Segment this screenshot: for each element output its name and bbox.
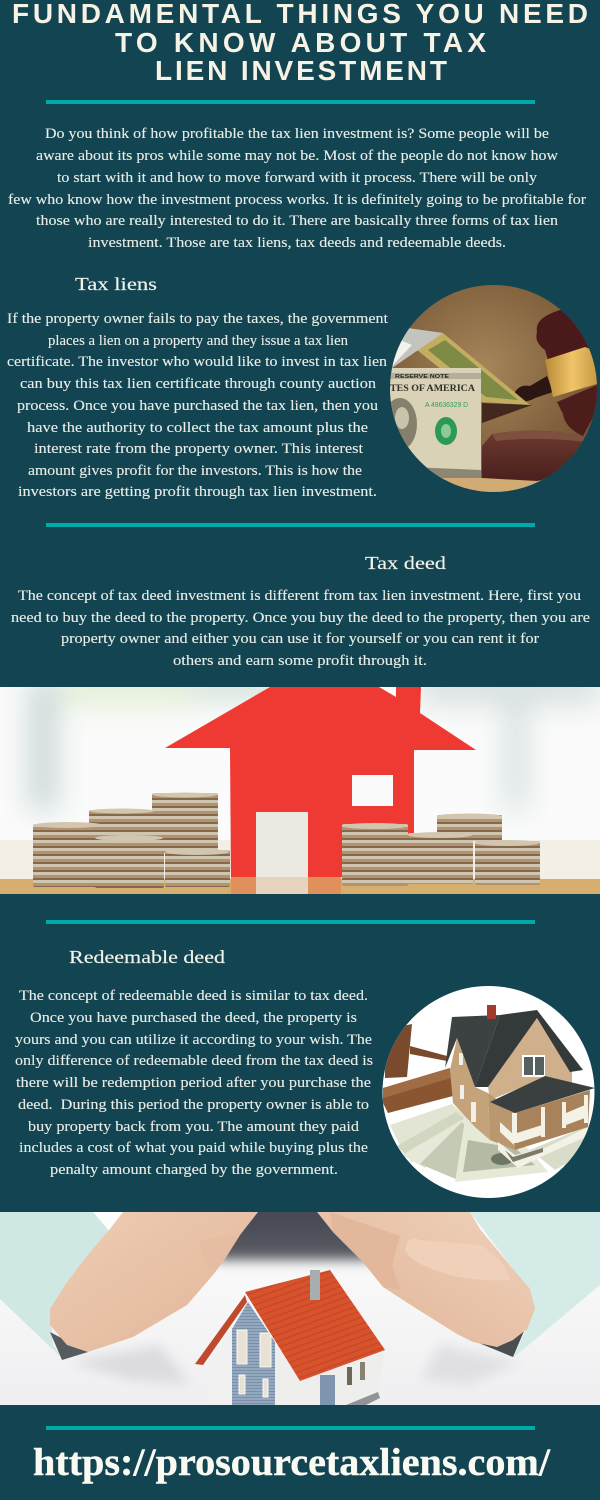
chimney — [487, 1005, 496, 1019]
text block: tax liens: certificate. The investor who would like to invest in tax lien — [7, 354, 387, 370]
house walls — [450, 1038, 490, 1140]
right hand — [317, 1212, 535, 1347]
text block: redeemable deed: only difference of redeemable deed from the tax deed is — [15, 1053, 373, 1069]
dollar roof — [417, 333, 530, 405]
left hand — [50, 1212, 258, 1352]
roofs — [445, 1015, 500, 1087]
windows — [237, 1330, 271, 1397]
image: dollar house and gavel circle: TES OF AMERICA — [390, 384, 475, 394]
text block: redeemable deed: includes a cost of what you paid while buying plus the — [19, 1140, 368, 1156]
image: dollar house and gavel circle: RESERVE NOTE — [395, 374, 450, 380]
text block: tax deed: need to buy the deed to the property. Once you buy the deed to the property, then you are — [11, 610, 590, 626]
chimney — [310, 1270, 320, 1300]
intro text block: investment. Those are tax liens, tax deeds and redeemable deeds. — [88, 235, 506, 251]
text block: tax liens: interest rate from the property owner. This interest — [34, 441, 363, 457]
text block: tax liens: process. Once you have purchased the tax lien, then you — [17, 398, 378, 414]
intro text block: aware about its pros while some may not be. Most of the people do not know how — [36, 148, 559, 164]
image: model house on money circle — [380, 984, 600, 1200]
coin stacks — [33, 793, 540, 888]
divider: after tax deed image — [46, 920, 535, 924]
text block: redeemable deed: yours and you can utilize it according to your wish. The — [15, 1032, 372, 1048]
text block: redeemable deed: buy property back from you. The amount they paid — [28, 1119, 360, 1135]
house walls — [208, 1329, 232, 1405]
window — [522, 1055, 545, 1077]
text block: tax deed: The concept of tax deed investment is different from tax lien investment. Here, first you — [18, 588, 581, 604]
dark backdrop — [218, 1212, 368, 1270]
red house — [165, 687, 476, 877]
text block: tax deed: others and earn some profit through it. — [173, 653, 427, 669]
footer url: https://prosourcetaxliens.com/ — [33, 1441, 551, 1484]
title: TO KNOW ABOUT TAX — [115, 27, 486, 58]
cuffs — [50, 1332, 88, 1360]
text block: redeemable deed: there will be redemption period after you purchase the — [16, 1075, 371, 1091]
intro text block — [8, 126, 586, 251]
text block: tax liens: have the authority to collect the tax amount plus the — [27, 420, 368, 436]
heading: Tax deed: Tax deed — [365, 553, 446, 573]
gavel head — [536, 310, 589, 359]
gavel handle — [515, 376, 553, 402]
sound block — [482, 430, 586, 481]
thumb — [405, 1238, 510, 1280]
divider: footer — [46, 1426, 535, 1430]
intro text block: Do you think of how profitable the tax lien investment is? Some people will be — [45, 126, 549, 142]
text block: tax liens: investors are getting profit through tax lien investment. — [18, 484, 377, 500]
divider: after tax liens — [46, 523, 535, 527]
table — [0, 879, 600, 894]
text block: redeemable deed: Once you have purchased the deed, the property is — [30, 1010, 357, 1026]
text block: redeemable deed — [15, 988, 373, 1178]
heading: Tax liens: Tax liens — [75, 274, 157, 294]
text block: tax liens: If the property owner fails to pay the taxes, the government — [7, 311, 388, 327]
gavel — [383, 1068, 453, 1113]
intro text block: to start with it and how to move forward with it process. There will be only — [57, 170, 538, 186]
money fan — [390, 1104, 470, 1146]
porch — [498, 1095, 590, 1168]
text block: tax liens: amount gives profit for the investors. This is how the — [28, 463, 362, 479]
divider: under title — [46, 100, 535, 104]
dollar bill front — [388, 368, 481, 480]
text block: tax deed: property owner and either you can use it for yourself or you can rent it for — [61, 631, 539, 647]
image: red paper house and coins — [0, 670, 600, 894]
text block: tax liens: places a lien on a property and they issue a tax lien — [48, 333, 348, 349]
text block: redeemable deed: penalty amount charged by the government. — [50, 1162, 338, 1178]
title: LIEN INVESTMENT — [155, 55, 447, 86]
text block: tax liens — [7, 311, 388, 500]
text block: redeemable deed: deed. During this period the property owner is able to — [18, 1097, 369, 1113]
title — [12, 0, 588, 86]
intro text block: few who know how the investment process works. It is definitely going to be profitable for — [8, 192, 586, 208]
text block: tax deed — [11, 588, 590, 669]
roof — [245, 1270, 385, 1381]
text block: redeemable deed: The concept of redeemable deed is similar to tax deed. — [19, 988, 368, 1004]
image: dollar house and gavel circle: A 49636329 D — [425, 400, 469, 409]
sleeves — [0, 1212, 110, 1358]
image: hands sheltering a house — [0, 1200, 600, 1405]
image: dollar house and gavel circle — [383, 283, 600, 495]
heading: Redeemable deed: Redeemable deed — [69, 947, 225, 967]
text block: tax liens: can buy this tax lien certificate through county auction — [20, 376, 376, 392]
intro text block: those who are really interested to do it. There are basically three forms of tax lien — [36, 213, 558, 229]
shadows — [82, 1344, 184, 1386]
